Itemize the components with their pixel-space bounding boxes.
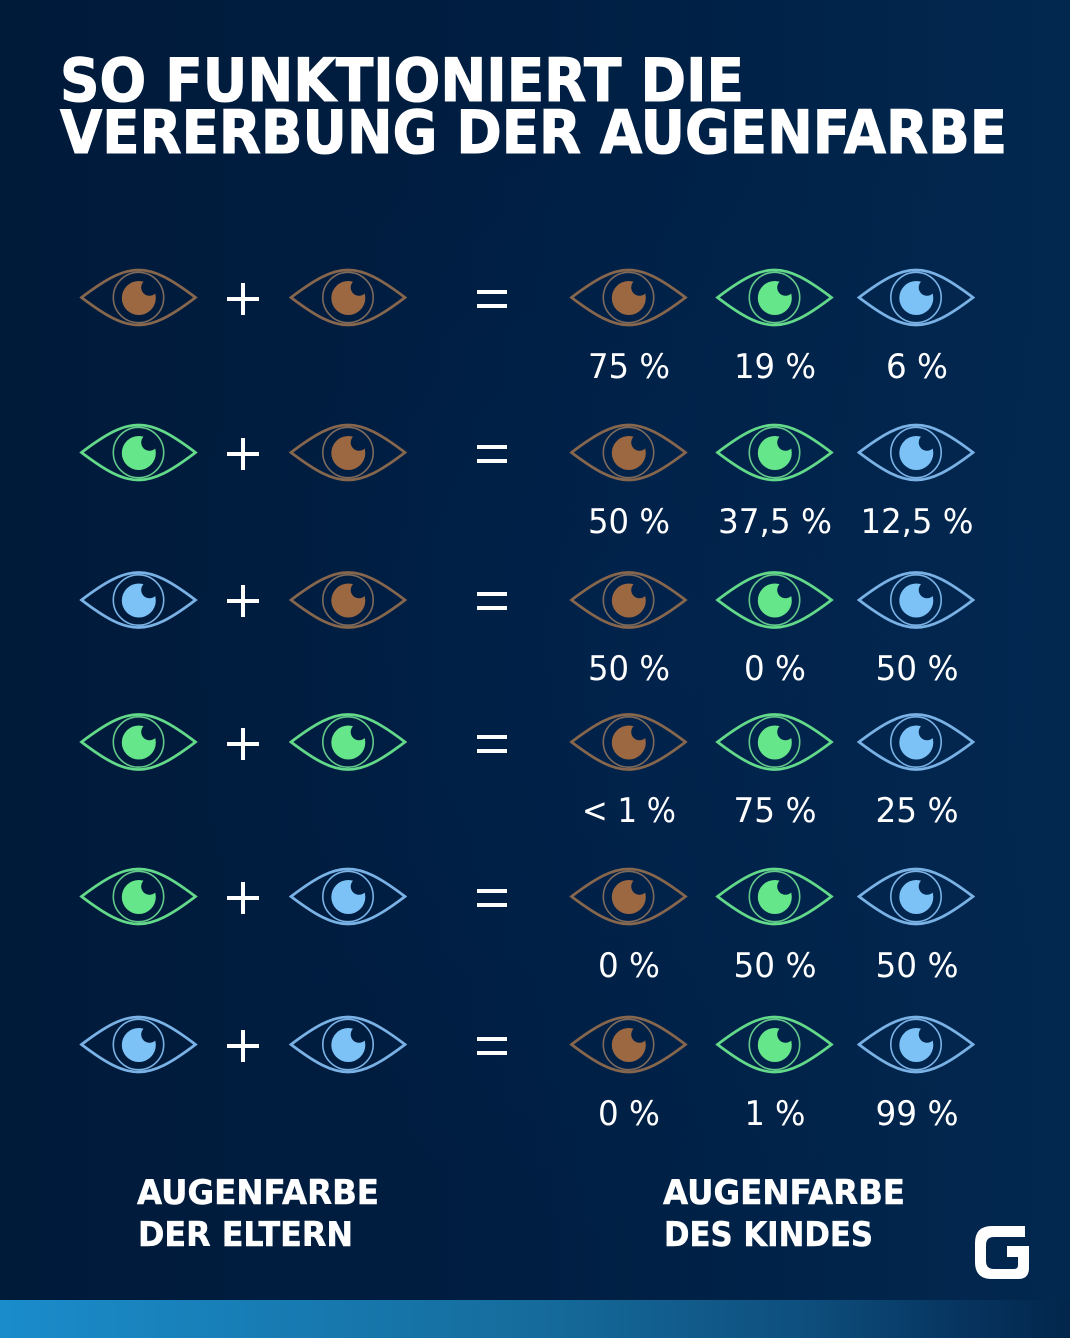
- child eye: green: [718, 425, 832, 480]
- label: child's eye colour: AUGENFARBE: [663, 1173, 905, 1213]
- label: parents' eye colour: AUGENFARBE: [137, 1173, 379, 1213]
- plus sign: [227, 728, 259, 760]
- child eye: brown: [572, 572, 686, 628]
- title: [60, 46, 1007, 168]
- percentage brown: 0 %: [598, 946, 660, 986]
- label: child's eye colour: [663, 1173, 905, 1255]
- child eye: brown: [572, 270, 686, 325]
- label: parents' eye colour: DER ELTERN: [138, 1215, 353, 1255]
- plus sign: [227, 882, 259, 914]
- percentage blue: 12,5 %: [860, 502, 974, 542]
- percentage green: 37,5 %: [718, 502, 832, 542]
- parent eye: blue: [291, 869, 405, 924]
- percentage brown: 50 %: [588, 649, 670, 689]
- child eye: green: [718, 270, 832, 325]
- plus sign: [227, 1030, 259, 1062]
- percentage brown: < 1 %: [582, 791, 676, 831]
- parent eye: blue: [82, 572, 196, 628]
- row 5: green + blue: [82, 869, 973, 986]
- equals sign: [477, 737, 507, 751]
- child eye: blue: [859, 869, 973, 924]
- row 1: brown + brown: [82, 270, 973, 387]
- equals sign: [477, 292, 507, 306]
- equals sign: [477, 891, 507, 905]
- percentage green: 50 %: [734, 946, 816, 986]
- equals sign: [477, 1039, 507, 1053]
- bottom gradient bar: [0, 1300, 1070, 1338]
- parent eye: green: [291, 714, 405, 770]
- child eye: green: [718, 869, 832, 924]
- percentage blue: 50 %: [876, 946, 958, 986]
- parent eye: brown: [291, 270, 405, 325]
- child eye: green: [718, 572, 832, 628]
- parent eye: green: [82, 869, 196, 924]
- percentage green: 0 %: [744, 649, 806, 689]
- child eye: blue: [859, 425, 973, 480]
- child eye: brown: [572, 1017, 686, 1072]
- plus sign: [227, 585, 259, 617]
- plus sign: [227, 283, 259, 315]
- title: SO FUNKTIONIERT DIE: [60, 46, 744, 116]
- equals sign: [477, 447, 507, 461]
- child eye: blue: [859, 714, 973, 770]
- plus sign: [227, 438, 259, 470]
- label: child's eye colour: DES KINDES: [664, 1215, 873, 1255]
- child eye: brown: [572, 869, 686, 924]
- percentage blue: 50 %: [876, 649, 958, 689]
- percentage green: 1 %: [744, 1094, 806, 1134]
- row 4: green + green: [82, 714, 973, 831]
- percentage blue: 6 %: [886, 347, 948, 387]
- percentage green: 19 %: [734, 347, 816, 387]
- percentage green: 75 %: [734, 791, 816, 831]
- child eye: blue: [859, 572, 973, 628]
- parent eye: brown: [291, 425, 405, 480]
- child eye: blue: [859, 270, 973, 325]
- parent eye: brown: [82, 270, 196, 325]
- parent eye: blue: [82, 1017, 196, 1072]
- parent eye: green: [82, 425, 196, 480]
- parent eye: green: [82, 714, 196, 770]
- row 3: blue + brown: [82, 572, 973, 689]
- percentage brown: 75 %: [588, 347, 670, 387]
- parent eye: blue: [291, 1017, 405, 1072]
- equals sign: [477, 594, 507, 608]
- percentage blue: 25 %: [876, 791, 958, 831]
- percentage brown: 50 %: [588, 502, 670, 542]
- logo: G: [975, 1226, 1029, 1279]
- child eye: blue: [859, 1017, 973, 1072]
- child eye: green: [718, 714, 832, 770]
- percentage brown: 0 %: [598, 1094, 660, 1134]
- title: VERERBUNG DER AUGENFARBE: [60, 98, 1007, 168]
- label: parents' eye colour: [137, 1173, 379, 1255]
- child eye: green: [718, 1017, 832, 1072]
- parent eye: brown: [291, 572, 405, 628]
- percentage blue: 99 %: [876, 1094, 958, 1134]
- child eye: brown: [572, 714, 686, 770]
- row 2: green + brown: [82, 425, 974, 542]
- row 6: blue + blue: [82, 1017, 973, 1134]
- child eye: brown: [572, 425, 686, 480]
